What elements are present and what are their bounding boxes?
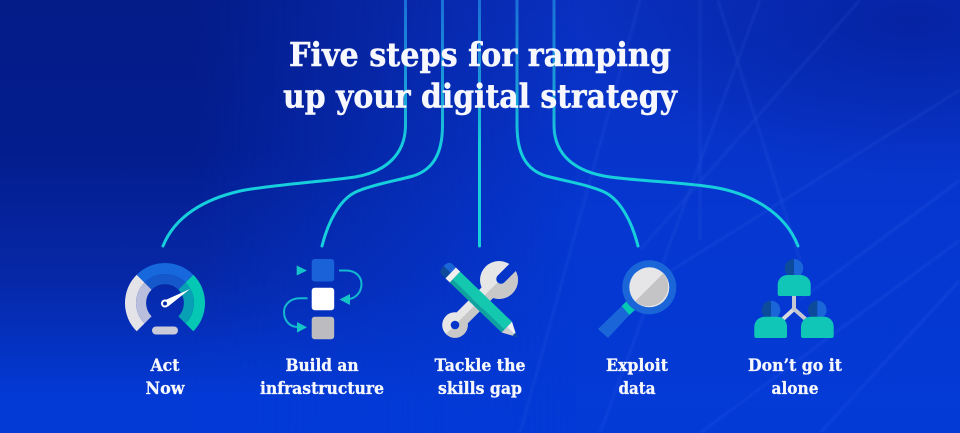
line to Build an infrastructure xyxy=(322,0,442,246)
person right xyxy=(801,301,834,338)
label: Don't go it alone: alone xyxy=(772,379,819,399)
label: Exploit data xyxy=(606,356,668,399)
label: Act Now xyxy=(146,356,185,399)
label: Build an infrastructure: infrastructure xyxy=(260,379,384,399)
label: Don't go it alone xyxy=(748,356,842,399)
label: Tackle the skills gap: skills gap xyxy=(438,379,522,399)
line to Tackle the skills gap xyxy=(478,0,481,246)
label: Build an infrastructure xyxy=(260,356,384,399)
line to Act Now xyxy=(163,0,406,246)
label: Exploit data: Exploit xyxy=(606,356,668,376)
label: Act Now: Act xyxy=(150,356,180,376)
icon: speedometer gauge xyxy=(125,263,205,334)
pencil xyxy=(438,261,523,343)
label: Tackle the skills gap: Tackle the xyxy=(434,356,526,376)
label: Act Now: Now xyxy=(146,379,185,399)
label: Don't go it alone: Don’t go it xyxy=(748,356,842,376)
label: Tackle the skills gap xyxy=(434,356,526,399)
icon: infrastructure blocks xyxy=(284,259,362,339)
connector lines xyxy=(163,0,798,246)
person top xyxy=(778,259,811,296)
connector xyxy=(782,296,806,320)
icon: magnifying glass xyxy=(598,260,676,338)
person left xyxy=(754,301,787,338)
title: up your digital strategy xyxy=(283,76,678,116)
wrench xyxy=(442,261,518,338)
label: Build an infrastructure: Build an xyxy=(286,356,358,376)
label: Exploit data: data xyxy=(618,379,656,399)
icon: wrench and pencil xyxy=(440,261,518,338)
title: Five steps for ramping xyxy=(289,35,671,74)
line to Exploit data xyxy=(517,0,638,246)
icon: connected people xyxy=(754,259,834,338)
title xyxy=(283,35,678,116)
line to Don't go it alone xyxy=(554,0,798,246)
